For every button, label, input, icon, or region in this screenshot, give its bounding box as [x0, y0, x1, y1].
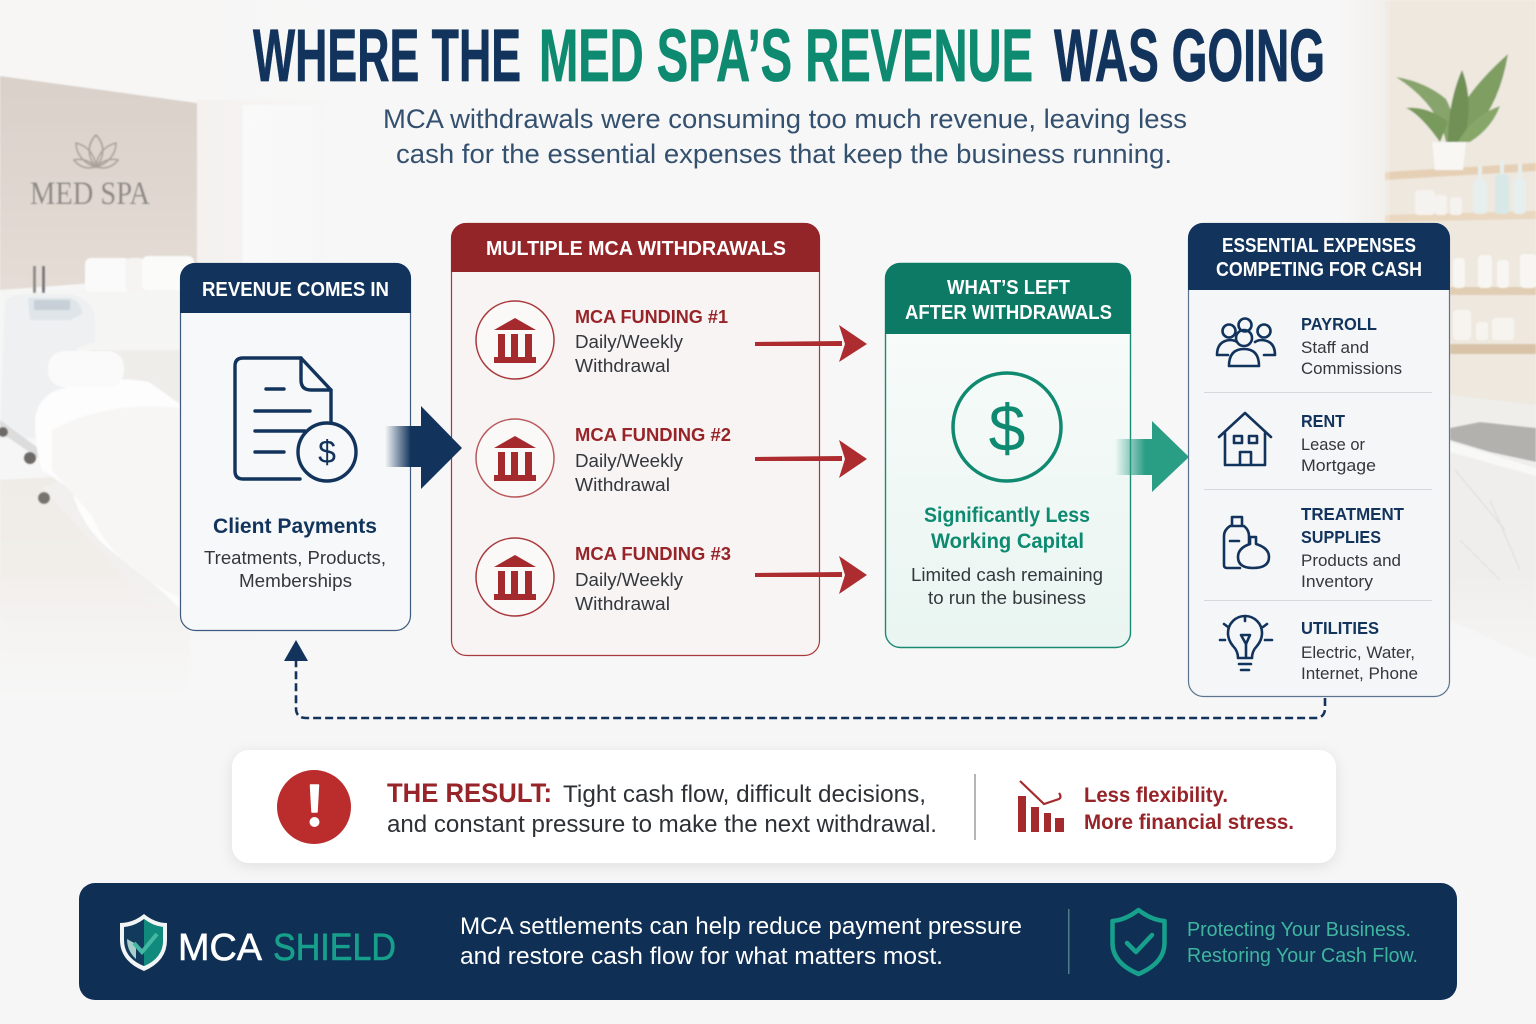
text: less flexibility: More financial stress.: [1084, 810, 1294, 834]
text: limited cash remaining: Limited cash remaining: [911, 565, 1103, 585]
arrow: funding 2 to what's left: [755, 440, 867, 478]
label: significantly less working capital: Significantly Less: [924, 504, 1090, 527]
item: utilities: [1220, 616, 1418, 683]
panel: what's left after withdrawals: [885, 263, 1131, 648]
item: utilities: Internet, Phone: [1301, 665, 1418, 683]
text: result statement: Tight cash flow, difficult decisions,: [563, 781, 926, 808]
item: payroll: PAYROLL: [1301, 314, 1377, 334]
panel header: expenses: [1188, 223, 1450, 290]
text: protecting your business: [1187, 918, 1418, 967]
item: treatment supplies: TREATMENT: [1301, 504, 1404, 524]
item: rent: RENT: [1301, 411, 1345, 431]
text: limited cash remaining: [911, 565, 1103, 608]
item: payroll: Staff and: [1301, 339, 1369, 357]
arrow: funding 1 to what's left: [755, 325, 867, 362]
item: rent: Lease or: [1301, 436, 1365, 454]
item: MCA funding 1: MCA FUNDING #1: [575, 306, 728, 327]
callout: the result: [232, 750, 1336, 863]
item: rent: [1219, 411, 1376, 475]
arrow: dashed feedback loop to revenue: [284, 640, 1325, 718]
text: result statement: THE RESULT:: [387, 778, 552, 808]
text: client payment sources: Treatments, Products,: [204, 548, 386, 568]
text: less flexibility: [1084, 783, 1294, 834]
logo text: MCA Shield: SHIELD: [273, 927, 396, 969]
item: MCA funding 3: [476, 538, 731, 616]
title: WHERE THE: [253, 14, 521, 97]
heading: what's left after withdrawals: [905, 277, 1112, 324]
label: significantly less working capital: Working Capital: [931, 530, 1084, 553]
text: protecting your business: Restoring Your Cash Flow.: [1187, 944, 1418, 967]
title: WAS GOING: [1054, 14, 1325, 97]
item: payroll: [1217, 314, 1402, 378]
item: rent: Mortgage: [1301, 457, 1376, 475]
item: payroll: Commissions: [1301, 360, 1402, 378]
heading: revenue comes in: REVENUE COMES IN: [202, 279, 389, 301]
panel header: what's left: [885, 263, 1131, 334]
arrow: what's left to expenses: [1115, 421, 1189, 492]
item: treatment supplies: SUPPLIES: [1301, 527, 1381, 547]
icon: falling bar chart: [1018, 781, 1064, 832]
item: MCA funding 1: Withdrawal: [575, 356, 670, 376]
heading: essential expenses competing for cash: [1216, 235, 1422, 281]
icon: dollar circle: $: [989, 391, 1025, 465]
item: utilities: Electric, Water,: [1301, 644, 1415, 662]
heading: multiple MCA withdrawals: MULTIPLE MCA WITHDRAWALS: [486, 238, 786, 260]
label: significantly less working capital: [924, 504, 1090, 553]
item: MCA funding 1: Daily/Weekly: [575, 332, 683, 352]
item: MCA funding 3: Withdrawal: [575, 594, 670, 614]
panel: revenue comes in: [180, 263, 411, 630]
panel header: withdrawals: [451, 223, 820, 272]
item: utilities: UTILITIES: [1301, 618, 1379, 638]
heading: essential expenses competing for cash: COMPETING FOR CASH: [1216, 259, 1422, 281]
text: settlements message: and restore cash flow for what matters most.: [460, 943, 943, 970]
heading: essential expenses competing for cash: ESSENTIAL EXPENSES: [1222, 235, 1416, 257]
arrow: funding 3 to what's left: [755, 556, 867, 594]
text: limited cash remaining: to run the business: [928, 588, 1086, 608]
panel: multiple MCA withdrawals: [451, 223, 820, 656]
panel header: revenue: [180, 263, 411, 313]
logo text: MCA Shield: [178, 927, 396, 969]
item: MCA funding 2: Withdrawal: [575, 475, 670, 495]
text: settlements message: [460, 913, 1022, 970]
icon: invoice with dollar coin: [235, 358, 356, 481]
item: MCA funding 2: [476, 419, 731, 497]
footer banner: [79, 883, 1457, 1000]
icon: invoice with dollar coin: $: [318, 434, 336, 470]
item: MCA funding 3: Daily/Weekly: [575, 570, 683, 590]
item: MCA funding 2: MCA FUNDING #2: [575, 424, 731, 445]
text: result statement: [387, 778, 937, 838]
item: MCA funding 2: Daily/Weekly: [575, 451, 683, 471]
heading: what's left after withdrawals: AFTER WITHDRAWALS: [905, 302, 1112, 324]
background photo: med spa treatment room: [0, 0, 1536, 700]
icon: MCA Shield logo: [120, 914, 167, 971]
item: treatment supplies: [1224, 504, 1404, 591]
text: client payment sources: [204, 548, 386, 591]
title: MED SPA’S REVENUE: [539, 14, 1033, 97]
background photo: med spa treatment room: MED SPA: [30, 176, 150, 212]
item: MCA funding 1: [476, 301, 728, 379]
subtitle: cash for the essential expenses that keep the business running.: [396, 139, 1172, 169]
subtitle: [383, 104, 1187, 169]
text: client payment sources: Memberships: [239, 571, 352, 591]
arrow: revenue to withdrawals: [385, 406, 462, 489]
label: client payments: Client Payments: [213, 515, 377, 538]
heading: what's left after withdrawals: WHAT’S LEFT: [947, 277, 1070, 299]
item: treatment supplies: Inventory: [1301, 573, 1374, 591]
item: treatment supplies: Products and: [1301, 552, 1401, 570]
text: settlements message: MCA settlements can help reduce payment pressure: [460, 913, 1022, 940]
text: less flexibility: Less flexibility.: [1084, 783, 1228, 807]
icon: dollar circle: [953, 373, 1061, 481]
text: result statement: and constant pressure to make the next withdrawal.: [387, 811, 937, 838]
icon: shield check: [1112, 910, 1164, 974]
panel: essential expenses: [1188, 223, 1450, 696]
item: MCA funding 3: MCA FUNDING #3: [575, 543, 731, 564]
icon: alert: [277, 770, 351, 844]
logo text: MCA Shield: MCA: [178, 927, 263, 969]
text: protecting your business: Protecting Your Business.: [1187, 918, 1411, 941]
subtitle: MCA withdrawals were consuming too much revenue, leaving less: [383, 104, 1187, 134]
